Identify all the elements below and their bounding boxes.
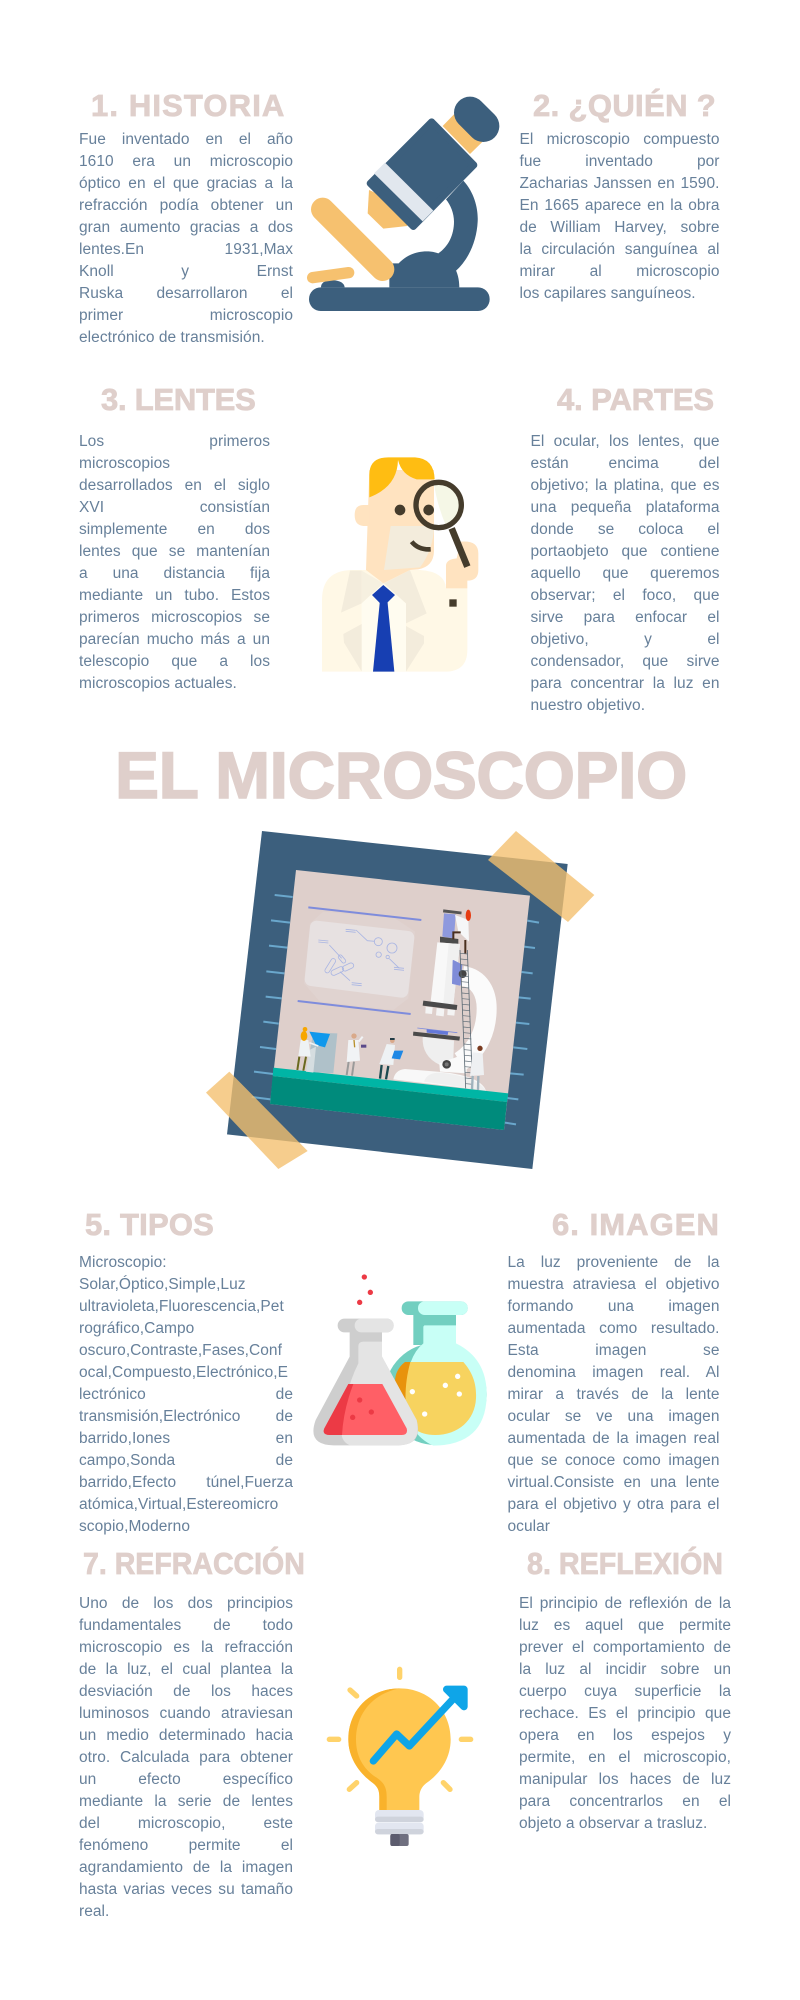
text block: imagen: que se conoce como imagen (508, 1452, 720, 1469)
text block: tipos: campo,Sonda de (79, 1452, 293, 1469)
text block: historia: óptico en el que gracias a la (79, 175, 293, 192)
text block: tipos: ultravioleta,Fluorescencia,Pet (79, 1298, 284, 1315)
text block: lentes: XVI consistían (79, 499, 270, 516)
text block: refraccion: hasta varias veces su tamaño (79, 1881, 293, 1898)
panel: quien (520, 88, 720, 302)
heading: 5. Tipos: 5. TIPOS (85, 1207, 214, 1242)
text block: reflexion: rechace. Es el principio que (519, 1705, 731, 1722)
text block: refraccion: un efecto específico (79, 1771, 293, 1788)
icon: flasks (313, 1274, 487, 1446)
text block: imagen: La luz proveniente de la (508, 1254, 720, 1271)
text block: quien: Zacharias Janssen en 1590. (520, 175, 720, 192)
heading: 2. Quien: 2. ¿QUIÉN ? (533, 88, 716, 123)
text block: quien (520, 131, 720, 302)
text block: historia: Knoll y Ernst (79, 263, 293, 280)
heading: 3. Lentes: 3. LENTES (101, 382, 256, 417)
text block: partes: observar; el foco, que (530, 587, 720, 604)
text block: partes: objetivo, y el (530, 631, 720, 648)
panel: tipos (79, 1207, 293, 1535)
text block: historia: lentes.En 1931,Max (79, 241, 293, 258)
text block: lentes: a una distancia fija (79, 565, 270, 582)
text block: lentes: Los primeros (79, 433, 270, 450)
text block: refraccion: fundamentales de todo (79, 1617, 293, 1634)
text block: quien: En 1665 aparece en la obra (520, 197, 720, 214)
text block: historia (79, 131, 293, 346)
text block: partes: El ocular, los lentes, que (530, 433, 720, 450)
text block: historia: Fue inventado en el año (79, 131, 293, 148)
text block: tipos: atómica,Virtual,Estereomicro (79, 1496, 278, 1513)
text block: imagen: mirar a través de la lente (508, 1386, 720, 1403)
text block: reflexion: objeto a observar a trasluz. (519, 1815, 707, 1832)
text block: partes: condensador, que sirve (530, 653, 720, 670)
panel: refraccion (79, 1546, 305, 1920)
text block: refraccion (79, 1595, 293, 1920)
text block: partes: donde se coloca el (530, 521, 720, 538)
text block: reflexion (519, 1595, 731, 1832)
text block: lentes: telescopio que a los (79, 653, 270, 670)
text block: tipos: oscuro,Contraste,Fases,Conf (79, 1342, 282, 1359)
title: EL MICROSCOPIO (115, 738, 687, 812)
text block: historia: primer microscopio (79, 307, 293, 324)
text block: quien: de William Harvey, sobre (520, 219, 720, 236)
text block: refraccion: otro. Calculada para obtener (79, 1749, 293, 1766)
text block: lentes: primeros microscopios se (79, 609, 270, 626)
panel: imagen (508, 1207, 720, 1535)
text block: lentes: microscopios (79, 455, 170, 472)
text block: tipos: Solar,Óptico,Simple,Luz (79, 1276, 246, 1293)
text block: refraccion: fenómeno permite el (79, 1837, 293, 1854)
text block: tipos: barrido,Efecto túnel,Fuerza (79, 1474, 293, 1491)
text block: lentes (79, 433, 270, 692)
text block: quien: mirar al microscopio (520, 263, 720, 280)
text block: quien: la circulación sanguínea al (520, 241, 720, 258)
text block: reflexion: la luz al incidir sobre un (519, 1661, 731, 1678)
text block: reflexion: opera en los espejos y (519, 1727, 731, 1744)
text block: tipos: scopio,Moderno (79, 1518, 190, 1535)
text block: imagen: virtual.Consiste en una lente (508, 1474, 720, 1491)
text block: imagen: formando una imagen (508, 1298, 720, 1315)
text block: imagen: para el objetivo y otra para el (508, 1496, 720, 1513)
text block: imagen: ocular se ve una imagen (508, 1408, 720, 1425)
text block: imagen: aumentada de la imagen real (508, 1430, 720, 1447)
text block: refraccion: desviación de los haces (79, 1683, 293, 1700)
text block: historia: electrónico de transmisión. (79, 329, 265, 346)
text block: refraccion: de la luz, el cual plantea la (79, 1661, 293, 1678)
text block: refraccion: real. (79, 1903, 109, 1920)
text block: reflexion: manipular los haces de luz (519, 1771, 731, 1788)
text block: lentes: desarrollados en el siglo (79, 477, 270, 494)
text block: lentes: lentes que se mantenían (79, 543, 270, 560)
text block: quien: los capilares sanguíneos. (520, 285, 696, 302)
icon: light bulb with rising arrow (326, 1666, 474, 1846)
text block: partes: nuestro objetivo. (530, 697, 645, 714)
text block: tipos: rográfico,Campo (79, 1320, 194, 1337)
text block: reflexion: permite, en el microscopio, (519, 1749, 731, 1766)
text block: historia: gran aumento gracias a dos (79, 219, 293, 236)
text block: imagen (508, 1254, 720, 1535)
text block: imagen: ocular (508, 1518, 550, 1535)
text block: imagen: muestra atraviesa el objetivo (508, 1276, 720, 1293)
panel: lentes (79, 382, 270, 692)
text block: tipos: lectrónico de (79, 1386, 293, 1403)
heading: 6. Imagen: 6. IMAGEN (552, 1207, 720, 1242)
text block: historia: 1610 era un microscopio (79, 153, 293, 170)
text block: reflexion: para concentrarlos en el (519, 1793, 731, 1810)
heading: 1. Historia: 1. HISTORIA (91, 88, 285, 123)
text block: imagen: denomina imagen real. Al (508, 1364, 720, 1381)
panel: partes (530, 382, 720, 714)
text block: refraccion: del microscopio, este (79, 1815, 293, 1832)
text block: refraccion: Uno de los dos principios (79, 1595, 293, 1612)
text block: partes (530, 433, 720, 714)
heading: 7. Refraccion: 7. REFRACCIÓN (83, 1546, 305, 1581)
heading: 4. Partes: 4. PARTES (557, 382, 714, 417)
text block: refraccion: microscopio es la refracción (79, 1639, 293, 1656)
text block: historia: Ruska desarrollaron el (79, 285, 293, 302)
text block: refraccion: luminosos cuando atraviesan (79, 1705, 293, 1722)
text block: reflexion: cuerpo cuya superficie la (519, 1683, 731, 1700)
illustration: lab scene poster (206, 831, 594, 1169)
text block: lentes: microscopios actuales. (79, 675, 237, 692)
text block: partes: portaobjeto que contiene (530, 543, 720, 560)
text block: reflexion: luz es aquel que permite (519, 1617, 731, 1634)
text block: partes: para concentrar la luz en (530, 675, 720, 692)
text block: lentes: parecían mucho más a un (79, 631, 270, 648)
text block: partes: están encima del (530, 455, 720, 472)
text block: reflexion: prever el comportamiento de (519, 1639, 731, 1656)
text block: refraccion: agrandamiento de la imagen (79, 1859, 293, 1876)
text block: reflexion: El principio de reflexión de la (519, 1595, 731, 1612)
text block: refraccion: un medio determinado hacia (79, 1727, 293, 1744)
icon: scientist with magnifier (322, 457, 478, 672)
text block: tipos: transmisión,Electrónico de (79, 1408, 293, 1425)
text block: quien: El microscopio compuesto (520, 131, 720, 148)
text block: partes: objetivo; la platina, que es (530, 477, 720, 494)
text block: partes: aquello que queremos (530, 565, 720, 582)
icon: microscope (307, 96, 500, 311)
text block: tipos: ocal,Compuesto,Electrónico,E (79, 1364, 288, 1381)
text block: tipos: barrido,Iones en (79, 1430, 293, 1447)
panel: reflexion (519, 1546, 731, 1832)
text block: quien: fue inventado por (520, 153, 720, 170)
text block: tipos: Microscopio: (79, 1254, 167, 1271)
text block: imagen: Esta imagen se (508, 1342, 720, 1359)
text block: imagen: aumentada como resultado. (508, 1320, 720, 1337)
text block: lentes: simplemente en dos (79, 521, 270, 538)
text block: refraccion: mediante la serie de lentes (79, 1793, 293, 1810)
text block: lentes: mediante un tubo. Estos (79, 587, 270, 604)
text block: partes: una pequeña plataforma (530, 499, 720, 516)
text block: historia: refracción podía obtener un (79, 197, 293, 214)
text block: partes: sirve para enfocar el (530, 609, 720, 626)
text block: tipos (79, 1254, 293, 1535)
panel: historia (79, 88, 293, 346)
heading: 8. Reflexion: 8. REFLEXIÓN (526, 1546, 722, 1581)
